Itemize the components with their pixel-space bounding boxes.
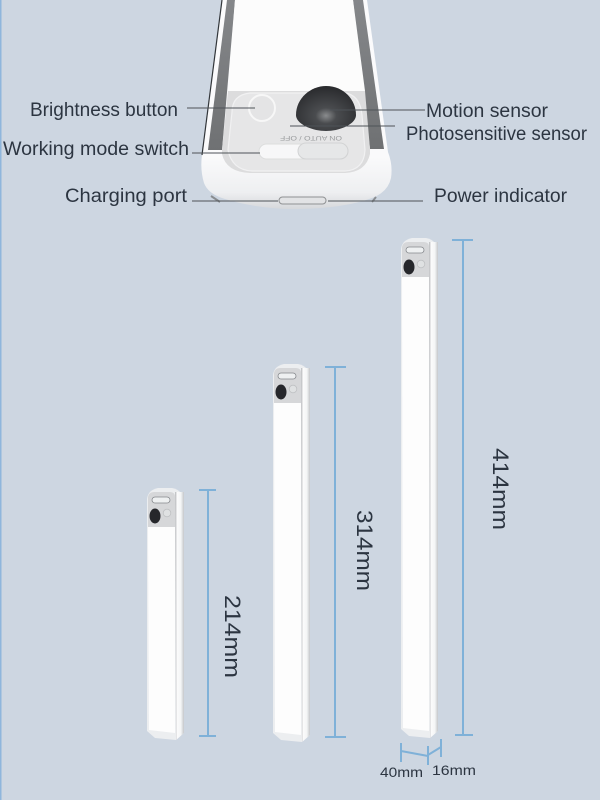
light bar: 414mm <box>401 238 438 738</box>
panel outline <box>228 93 365 171</box>
left edge line <box>0 0 2 800</box>
label: working mode switch: Working mode switch <box>3 139 189 160</box>
housing <box>201 0 392 209</box>
control plate <box>148 492 175 527</box>
switch slider <box>298 143 348 159</box>
light panel <box>228 0 365 91</box>
brightness button <box>249 95 275 121</box>
silver rail <box>429 242 438 738</box>
label: charging port: Charging port <box>65 186 188 207</box>
light bar: 214mm <box>147 488 184 740</box>
label: photosensitive sensor: Photosensitive sensor <box>406 124 588 145</box>
silver rail <box>175 492 184 740</box>
corner marks <box>211 196 376 202</box>
light panel <box>148 527 175 733</box>
switch <box>406 247 424 253</box>
left grey strip <box>208 0 235 150</box>
control plate <box>402 242 429 277</box>
mode markings: ON AUTO / OFF <box>280 134 342 141</box>
sensor <box>276 384 286 400</box>
switch <box>152 497 170 503</box>
button <box>289 385 297 393</box>
button <box>163 509 171 517</box>
motion sensor dome <box>296 86 356 131</box>
dimension line: 214mm <box>199 490 216 736</box>
dimension label: 40mm: 40mm <box>380 764 423 780</box>
label: motion sensor: Motion sensor <box>426 101 549 122</box>
control panel <box>222 91 370 173</box>
silver rail <box>301 368 310 742</box>
dimension label: 414mm: 414mm <box>488 448 513 530</box>
light panel <box>274 403 301 735</box>
dimension label: 214mm: 214mm <box>220 595 245 678</box>
product close-up <box>187 0 425 209</box>
dimension line: 414mm <box>452 240 473 735</box>
dimension label: 16mm: 16mm <box>432 762 476 778</box>
button <box>417 260 425 268</box>
sensor <box>150 508 160 524</box>
sensor <box>404 260 414 274</box>
bar body <box>147 488 184 740</box>
mode switch <box>259 144 348 159</box>
bar body <box>273 364 310 742</box>
leader lines <box>187 108 425 201</box>
right grey strip <box>353 0 384 149</box>
light bar: 314mm <box>273 364 310 742</box>
label: brightness button: Brightness button <box>30 100 178 121</box>
label: power indicator: Power indicator <box>434 186 568 207</box>
dimension label: 314mm: 314mm <box>352 510 377 591</box>
control plate <box>274 368 301 403</box>
charging port <box>279 197 326 204</box>
switch <box>278 373 296 379</box>
dimension line: 314mm <box>325 367 346 737</box>
bar body <box>401 238 438 738</box>
light panel <box>402 277 429 731</box>
left edge shadow <box>202 0 222 155</box>
width and depth dimension marks <box>401 739 441 765</box>
